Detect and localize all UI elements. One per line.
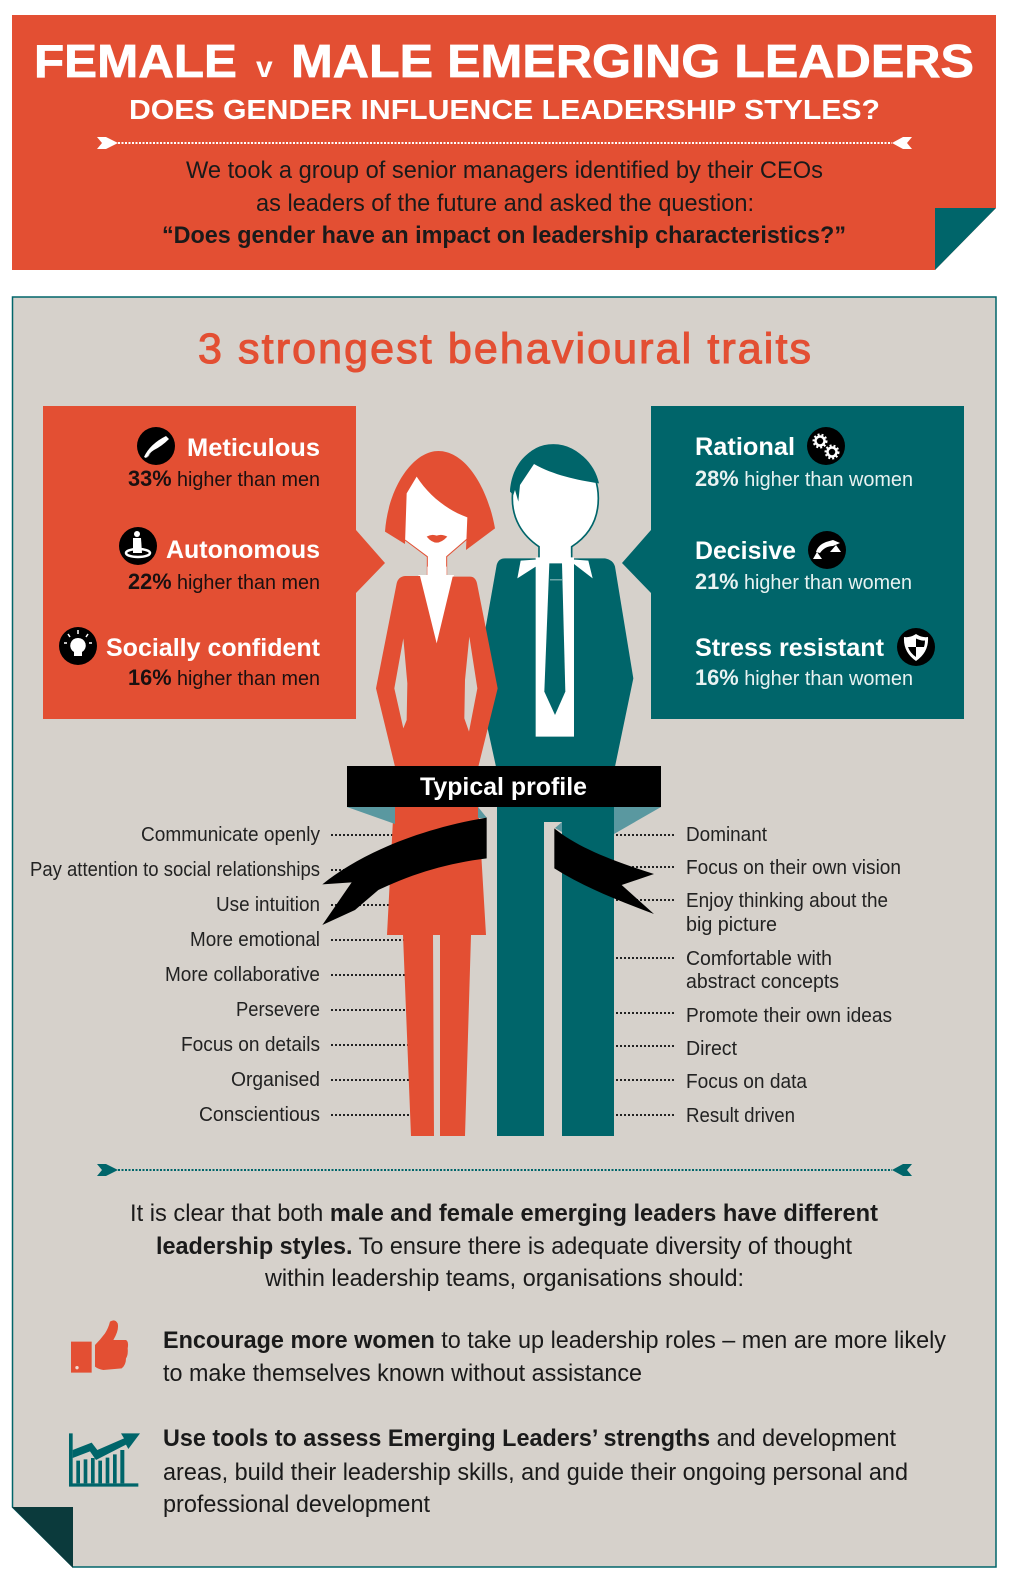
section heading: 3 strongest behavioural traits	[198, 325, 811, 373]
female profile list: Pay attention to social relationships	[30, 859, 320, 881]
man head	[512, 445, 598, 560]
woman face	[405, 470, 470, 577]
female profile list: Use intuition	[216, 894, 320, 916]
intro text	[162, 157, 846, 249]
title: FEMALE	[34, 35, 237, 87]
lower divider arrows	[97, 1164, 912, 1176]
intro text: as leaders of the future and asked the question:	[256, 190, 754, 217]
male profile list: Enjoy thinking about the	[686, 890, 888, 912]
female profile list: Communicate openly	[141, 824, 320, 846]
man trousers	[497, 800, 614, 1136]
trait: decisive: Decisive	[695, 537, 796, 565]
conclusion text: It is clear that both male and female emerging leaders have different	[130, 1200, 878, 1227]
title	[34, 35, 974, 87]
title: v	[256, 51, 273, 84]
trait: autonomous	[119, 527, 320, 594]
panel fold corner	[12, 1507, 73, 1568]
trait: meticulous: Meticulous	[187, 434, 320, 462]
female profile list: Persevere	[236, 999, 320, 1021]
panel: male traits	[622, 406, 964, 719]
male profile list: Direct	[686, 1038, 737, 1060]
man tie	[544, 563, 565, 715]
trait: socially confident	[59, 627, 321, 690]
man shirt and collar	[517, 557, 593, 737]
woman jaw and neck outline	[405, 539, 467, 577]
woman V neck	[418, 567, 454, 644]
figure: woman	[376, 451, 498, 1136]
woman skirt	[387, 800, 486, 1136]
trait: meticulous	[128, 427, 320, 491]
recommendation: use tools: areas, build their leadership skills, and guide their ongoing personal and	[163, 1459, 908, 1486]
recommendation: use tools: Use tools to assess Emerging Leaders’ strengths and development	[163, 1425, 896, 1452]
profile dotted leaders	[331, 835, 676, 1115]
header fold corner	[935, 208, 996, 270]
header banner	[12, 15, 996, 270]
recommendation: use tools	[163, 1425, 908, 1518]
woman arm gaps	[394, 637, 477, 732]
male profile list: Dominant	[686, 824, 767, 846]
female profile list: Organised	[231, 1069, 320, 1091]
intro text: “Does gender have an impact on leadership characteristics?”	[162, 222, 846, 249]
banner folds	[347, 807, 661, 834]
trait: rational: 28% higher than women	[695, 466, 913, 491]
trait: rational: Rational	[695, 433, 795, 461]
conclusion text: leadership styles. To ensure there is adequate diversity of thought	[156, 1233, 852, 1260]
man torso	[477, 558, 633, 767]
icon: thumbs up	[71, 1320, 128, 1373]
trait: decisive	[695, 531, 912, 594]
trait: stress resistant: Stress resistant	[695, 634, 885, 662]
female profile list: Focus on details	[181, 1034, 320, 1056]
trait: autonomous: 22% higher than men	[128, 569, 320, 594]
trait: stress resistant	[695, 628, 935, 690]
man hair	[510, 445, 599, 502]
woman lips	[427, 535, 447, 543]
intro text: We took a group of senior managers identified by their CEOs	[186, 157, 823, 184]
woman jacket	[376, 576, 498, 767]
trait: autonomous: Autonomous	[166, 536, 320, 564]
figure: man	[477, 445, 633, 1136]
subtitle: DOES GENDER INFLUENCE LEADERSHIP STYLES?	[129, 94, 880, 125]
icon: growth chart	[69, 1433, 140, 1487]
trait: socially confident: Socially confident	[106, 634, 321, 662]
conclusion text: within leadership teams, organisations should:	[264, 1265, 744, 1292]
main panel	[12, 297, 996, 1568]
trait: stress resistant: 16% higher than women	[695, 665, 913, 690]
conclusion text	[130, 1200, 878, 1292]
trait: socially confident: 16% higher than men	[128, 665, 320, 690]
male profile list: Comfortable with	[686, 948, 832, 970]
recommendation: use tools: professional development	[163, 1491, 430, 1518]
banner: typical profile	[322, 766, 661, 925]
title: MALE EMERGING LEADERS	[291, 35, 974, 87]
panel: female traits	[43, 406, 385, 719]
trait: decisive: 21% higher than women	[695, 569, 912, 594]
male profile list: big picture	[686, 914, 777, 936]
recommendation: encourage women: to make themselves known without assistance	[163, 1360, 642, 1387]
trait: meticulous: 33% higher than men	[128, 466, 320, 491]
female profile list	[30, 824, 320, 1126]
female profile list: More collaborative	[165, 964, 320, 986]
male profile list: abstract concepts	[686, 971, 839, 993]
male profile list: Result driven	[686, 1105, 795, 1127]
female profile list: More emotional	[190, 929, 320, 951]
header divider arrows	[97, 137, 912, 149]
woman hair	[385, 451, 495, 550]
recommendation: encourage women	[163, 1327, 946, 1387]
recommendation: encourage women: Encourage more women to take up leadership roles – men are more likely	[163, 1327, 946, 1354]
trait: rational	[695, 427, 913, 491]
banner: typical profile: Typical profile	[420, 773, 587, 801]
male profile list: Promote their own ideas	[686, 1005, 892, 1027]
ribbon tails	[322, 818, 654, 925]
female profile list: Conscientious	[199, 1104, 320, 1126]
male profile list: Focus on data	[686, 1071, 808, 1093]
male profile list: Focus on their own vision	[686, 857, 901, 879]
male profile list	[686, 824, 901, 1127]
